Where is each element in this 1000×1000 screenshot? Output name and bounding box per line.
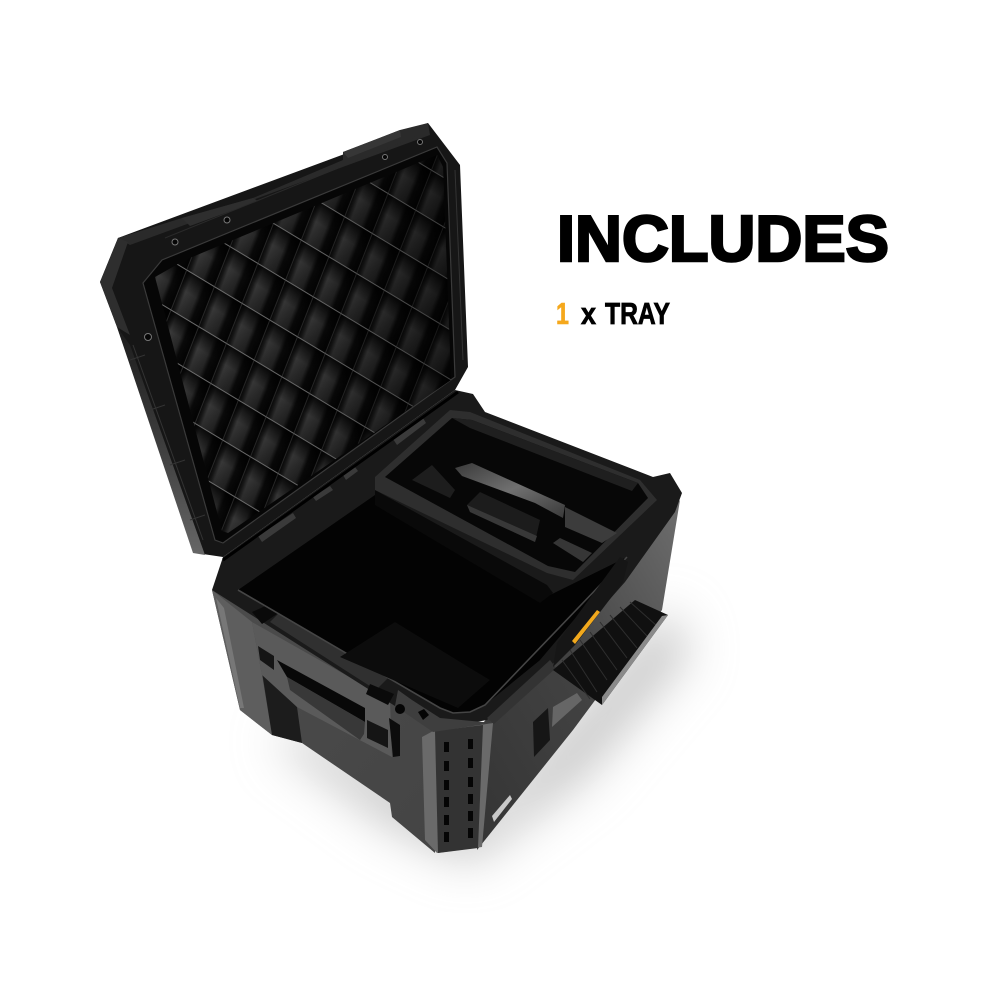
cavity rim highlight <box>238 557 627 713</box>
lid top edge pieces <box>118 123 430 245</box>
left face of box <box>212 590 440 853</box>
floor shadow <box>275 610 690 862</box>
lid screws <box>144 140 422 340</box>
right side clip <box>533 708 550 757</box>
lid gasket <box>143 147 455 543</box>
left carry handle <box>252 622 400 757</box>
box body <box>212 390 682 853</box>
item label: TRAY <box>605 297 670 331</box>
top rim of box <box>212 390 682 730</box>
main cavity <box>238 495 627 713</box>
diamond grid panel <box>155 155 451 533</box>
item count <box>556 297 670 331</box>
number one: 1 <box>556 297 569 331</box>
hinge seam <box>223 392 458 560</box>
latch strip <box>553 557 628 667</box>
tray left pocket <box>412 465 455 498</box>
pull-out side handle <box>553 557 668 705</box>
corner vent panel <box>422 723 512 853</box>
yellow latch accent <box>572 610 600 644</box>
storage tray <box>375 410 657 603</box>
tray interior <box>385 418 648 572</box>
vent slots <box>444 739 473 842</box>
cavity floor <box>340 622 490 708</box>
tray back rim <box>375 410 657 580</box>
handle grey lip <box>602 615 668 705</box>
right face of box <box>477 500 680 850</box>
tray grip recess <box>467 492 540 542</box>
tray front wall <box>375 490 553 603</box>
rim sockets <box>252 604 540 720</box>
grid shading <box>155 155 451 533</box>
tray handle ridge <box>455 463 565 518</box>
handle ribs <box>562 602 657 699</box>
lid side edge <box>117 327 205 555</box>
handle plate <box>553 600 668 705</box>
hinge details <box>258 418 426 542</box>
open lid <box>100 123 468 560</box>
heading: INCLUDES <box>557 202 889 275</box>
left corner column <box>212 590 272 735</box>
lid frame <box>100 123 468 557</box>
lid frame ribs <box>130 135 463 540</box>
tray right pockets <box>565 507 617 543</box>
multiplier x: x <box>581 297 596 331</box>
